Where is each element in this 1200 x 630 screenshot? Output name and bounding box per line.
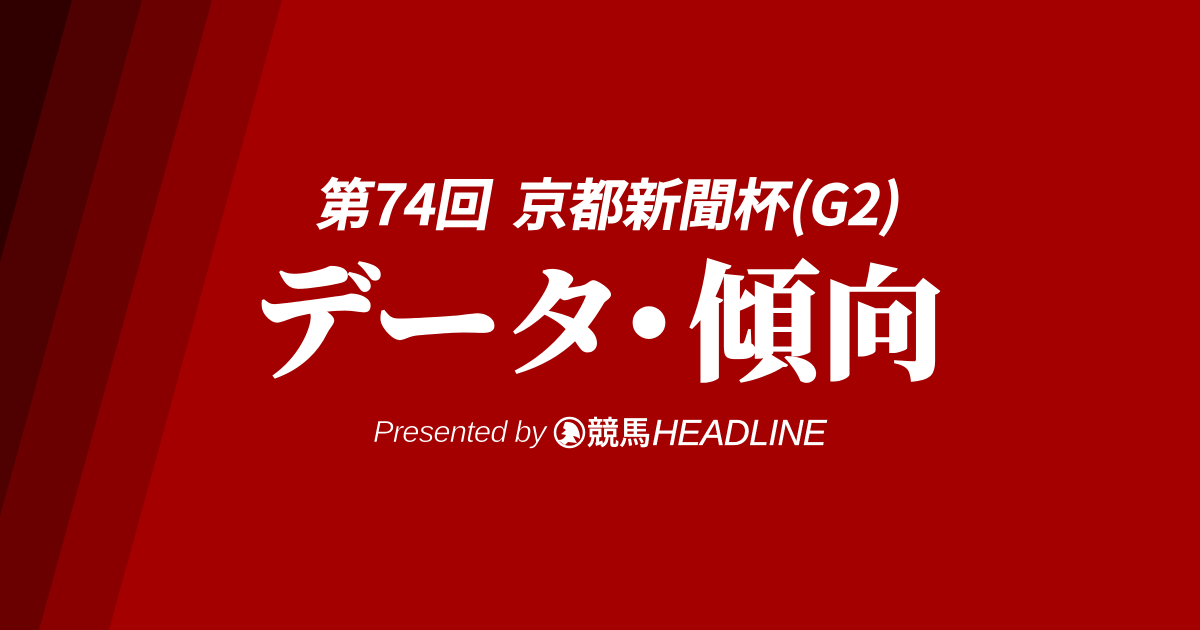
presented by: Presented by xyxy=(373,414,545,449)
main title: 向 xyxy=(820,227,944,405)
icon: horse logo xyxy=(554,416,586,448)
subtitle: 第74回 京都新聞杯(G2) xyxy=(311,161,909,242)
main title: デ xyxy=(250,218,380,405)
main title: ・ xyxy=(584,223,714,410)
brand kanji: 競馬 xyxy=(587,408,651,454)
main title: タ xyxy=(505,229,623,399)
main title: 傾 xyxy=(689,221,819,408)
brand name: HEADLINE xyxy=(652,412,826,453)
main title: ー xyxy=(372,224,502,411)
